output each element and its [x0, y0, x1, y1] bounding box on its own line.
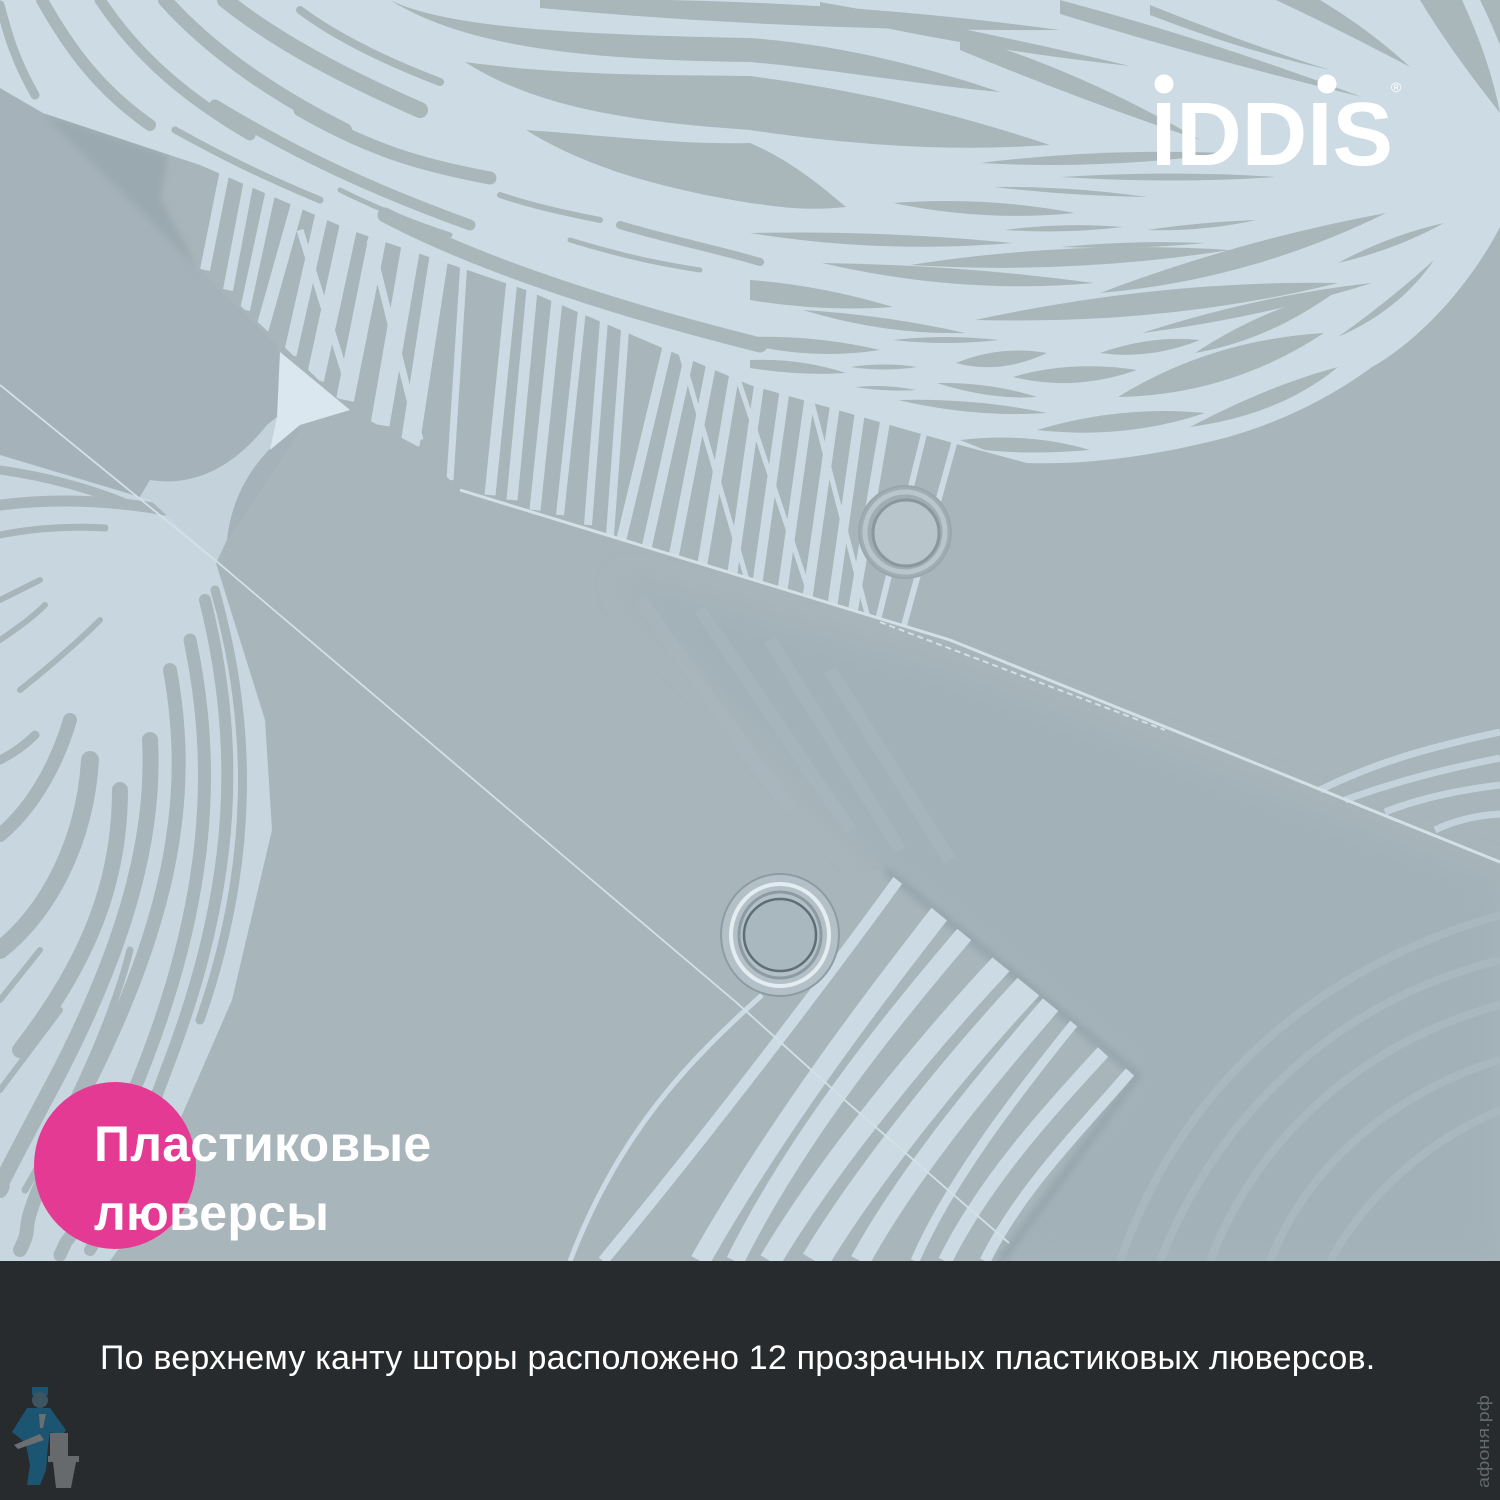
logo: iDDiS: ® — [1391, 79, 1402, 95]
icon: plumber with toilet — [12, 1387, 79, 1488]
panel: left leaf — [0, 455, 272, 1261]
panel: middle fabric shadow and right lower fabric — [540, 580, 1500, 1261]
heading: Пластиковые — [94, 1116, 431, 1172]
panel: left fold with plain fabric — [0, 85, 350, 565]
panel: top sheet big leaf — [0, 0, 1500, 463]
vertical watermark: афоня.рф — [1474, 1395, 1493, 1488]
description text: По верхнему канту шторы расположено 12 прозрачных пластиковых люверсов. — [100, 1339, 1375, 1377]
light band between circles — [120, 417, 283, 565]
seam stitching lines — [0, 385, 1500, 1243]
panel: lower hem strands — [570, 880, 1130, 1261]
panel: top hem strip with vertical strands — [200, 174, 957, 626]
strands on right hem — [1320, 732, 1500, 830]
faint strands on right fabric — [1120, 915, 1500, 1261]
icon: lower grommet — [721, 874, 839, 996]
pink circle accent — [34, 1082, 196, 1249]
logo: iDDiS: IDDIS — [1151, 85, 1393, 185]
heading: люверсы — [94, 1185, 329, 1241]
white triangle highlight — [270, 352, 350, 450]
faint strands under upper grommet — [640, 600, 950, 860]
footer bar — [0, 1261, 1500, 1500]
icon: upper grommet — [859, 486, 951, 578]
heading — [94, 1116, 431, 1241]
